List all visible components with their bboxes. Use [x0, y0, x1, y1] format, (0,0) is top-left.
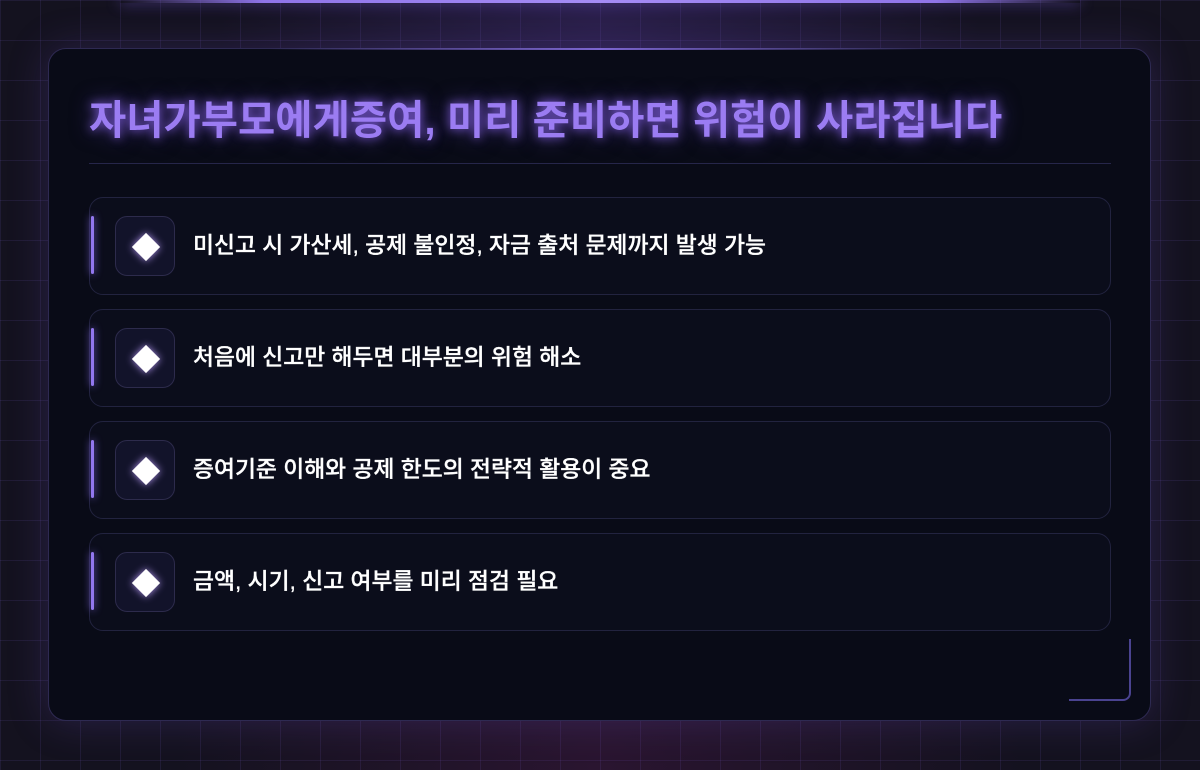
text: 증여기준 이해와 공제 한도의 전략적 활용이 중요	[193, 456, 650, 482]
icon: diamond	[115, 216, 175, 276]
item 4	[89, 533, 1111, 631]
item 3	[89, 421, 1111, 519]
item 1	[89, 197, 1111, 295]
icon: diamond	[115, 440, 175, 500]
corner bracket	[1069, 639, 1131, 701]
text: 금액, 시기, 신고 여부를 미리 점검 필요	[193, 568, 558, 594]
title: 자녀가부모에게증여, 미리 준비하면 위험이 사라집니다	[89, 97, 1002, 143]
text: 처음에 신고만 해두면 대부분의 위험 해소	[193, 344, 581, 370]
icon: diamond	[115, 552, 175, 612]
icon: diamond	[115, 328, 175, 388]
item 2	[89, 309, 1111, 407]
text: 미신고 시 가산세, 공제 불인정, 자금 출처 문제까지 발생 가능	[193, 232, 766, 258]
top glow bar	[120, 0, 1080, 3]
